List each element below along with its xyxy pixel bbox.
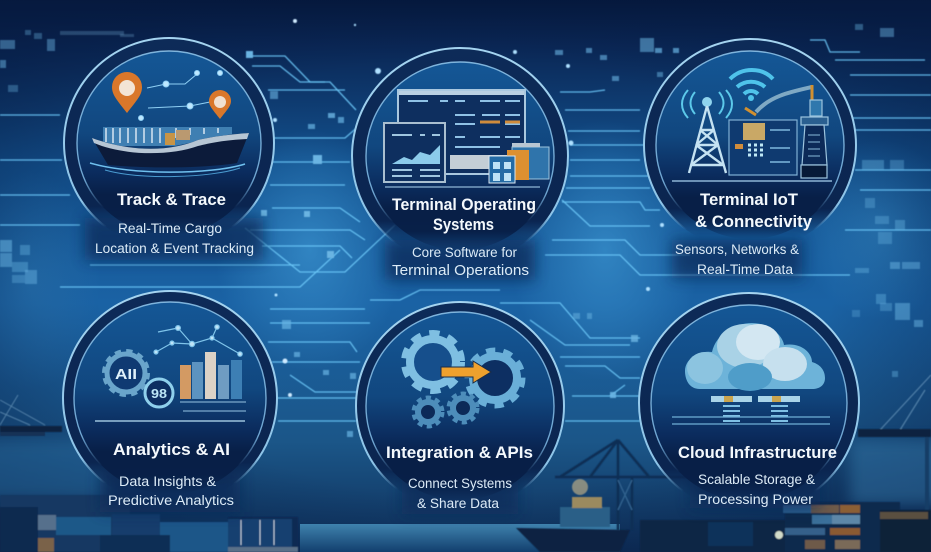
circuit traces [0, 40, 931, 421]
icon: location pin small [209, 90, 231, 119]
subtitle: Data Insights & [119, 474, 216, 489]
heading line 2: Systems [433, 215, 494, 234]
subtitle: Sensors, Networks & [675, 242, 799, 257]
panel: Integration & APIs [356, 302, 564, 514]
subtitle line 2: Real-Time Data [697, 262, 793, 277]
icon: chip badge [145, 379, 173, 407]
divider [385, 186, 540, 188]
water [300, 524, 620, 552]
icon: large gear [405, 334, 461, 390]
disc [356, 302, 564, 510]
subtitle line 2: Terminal Operations [392, 263, 529, 279]
icon: crane arm [745, 85, 812, 115]
disc [63, 291, 277, 505]
panel: Terminal IoT & Connectivity [644, 39, 856, 278]
icon: control tower [801, 100, 828, 178]
ship [516, 479, 630, 552]
disc [639, 293, 859, 513]
icon: small gear left [414, 398, 442, 426]
subtitle line 2: & Share Data [417, 496, 499, 511]
panel: Analytics & AI [63, 291, 277, 512]
icon: radio tower [682, 90, 732, 173]
subtitle: Connect Systems [408, 476, 512, 491]
icon: location pin large [112, 72, 142, 113]
icon: chip badge: 98 [151, 386, 167, 401]
heading line 2: & Connectivity [695, 212, 813, 231]
icon: right gear [468, 351, 522, 405]
heading: Cloud Infrastructure [678, 443, 837, 462]
containers right [640, 502, 931, 552]
bar chart [180, 352, 246, 411]
panel: Terminal Operating Systems [352, 48, 568, 280]
panel: Track & Trace [64, 38, 274, 260]
text band [672, 240, 802, 278]
subtitle line 2: Predictive Analytics [108, 493, 234, 508]
divider [95, 420, 245, 422]
heading: Terminal Operating [392, 195, 536, 214]
divider [672, 180, 832, 182]
icon: control unit [729, 120, 797, 175]
subtitle: Real-Time Cargo [118, 221, 222, 236]
containers left [0, 495, 298, 552]
panel: Cloud Infrastructure [639, 293, 859, 513]
light haze right [850, 440, 931, 505]
disc [352, 48, 568, 264]
arrow [441, 361, 491, 383]
icon: small gear right [449, 394, 477, 422]
icon: servers [672, 396, 830, 424]
subtitle: Core Software for [412, 245, 517, 260]
icon: wifi [730, 70, 773, 101]
harbor scene [0, 375, 931, 552]
icon: cloud [685, 323, 825, 391]
icon: monitor [398, 90, 525, 174]
heading: Analytics & AI [113, 440, 230, 459]
icon: tablet chart [384, 123, 445, 182]
disc [644, 39, 856, 251]
heading: Integration & APIs [386, 443, 533, 462]
icon: document stack [489, 143, 549, 183]
icon: network nodes [154, 325, 242, 356]
icon: container ship [90, 127, 249, 177]
text band [402, 472, 518, 514]
heading: Terminal IoT [700, 190, 799, 209]
disc [64, 38, 274, 248]
subtitle: Scalable Storage & [698, 472, 815, 487]
subtitle line 2: Location & Event Tracking [95, 241, 254, 256]
text band [385, 240, 535, 280]
icon: AI gear [105, 352, 147, 394]
icon: right crane [858, 375, 931, 527]
icon: route network [138, 70, 222, 120]
text band [85, 218, 263, 260]
text band [100, 470, 240, 512]
text band [690, 470, 820, 508]
icon: left crane [0, 395, 62, 436]
center crane [555, 440, 690, 530]
subtitle line 2: Processing Power [698, 492, 814, 507]
light haze [0, 440, 110, 500]
heading: Track & Trace [117, 190, 226, 209]
data squares [0, 19, 923, 437]
icon: AI gear: AII [115, 366, 137, 383]
